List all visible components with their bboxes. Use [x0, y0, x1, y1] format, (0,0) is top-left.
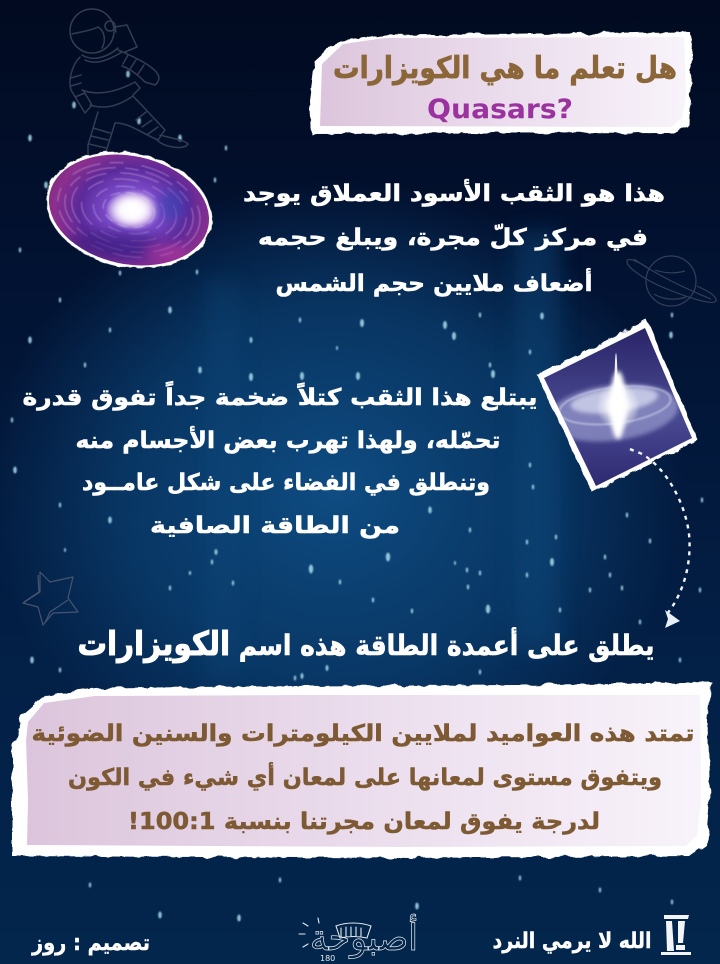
- text block: supermassive black hole: أضعاف ملايين حجم الشمس: [276, 267, 592, 297]
- text block: supermassive black hole: [243, 178, 665, 297]
- text: designer credit: تصميم : روز: [31, 931, 150, 956]
- text: footer motto: الله لا يرمي النرد: [492, 929, 652, 954]
- logo: Osbooha 180: 180: [320, 954, 335, 963]
- text block: jet of energy: من الطاقة الصافية: [150, 513, 400, 539]
- panel: title: [309, 32, 692, 134]
- icon: book: [661, 915, 691, 955]
- text block: jet of energy: [22, 381, 538, 539]
- panel: brightness explanation: [12, 682, 712, 858]
- icon: astronaut outline: [70, 9, 188, 155]
- logo: Osbooha 180: أصبوحة: [310, 914, 418, 959]
- text block: panel lines: ويتفوق مستوى لمعانها على لمعان أي شيء في الكون: [68, 761, 662, 791]
- icon: galaxy image: [46, 150, 213, 269]
- text block: supermassive black hole: هذا هو الثقب الأسود العملاق يوجد: [243, 178, 665, 207]
- heading: Quasars: Quasars?: [427, 94, 573, 125]
- icon: planet outline: [627, 256, 716, 306]
- text block: panel lines: تمتد هذه العواميد لملايين الكيلومترات والسنين الضوئية: [32, 721, 694, 747]
- arrow: dotted curve: [630, 449, 690, 628]
- text block: jet of energy: يبتلع هذا الثقب كتلاً ضخمة جداً تفوق قدرة: [22, 381, 538, 411]
- heading: energy columns are called quasars: يطلق على أعمدة الطاقة هذه اسم الكويزارات: [78, 624, 655, 664]
- text block: jet of energy: تحمّله، ولهذا تهرب بعض الأجسام منه: [76, 425, 500, 454]
- text block: panel lines: لدرجة يفوق لمعان مجرتنا بنسبة 100:1!: [128, 809, 600, 835]
- text block: jet of energy: وتنطلق في الفضاء على شكل عامــود: [82, 470, 490, 496]
- icon: star outline: [23, 572, 78, 625]
- icon: quasar image: [537, 320, 698, 492]
- text block: panel lines: [32, 721, 694, 835]
- text block: supermassive black hole: في مركز كلّ مجرة، ويبلغ حجمه: [258, 224, 648, 251]
- heading: Arabic title: هل تعلم ما هي الكويزارات: [333, 51, 677, 86]
